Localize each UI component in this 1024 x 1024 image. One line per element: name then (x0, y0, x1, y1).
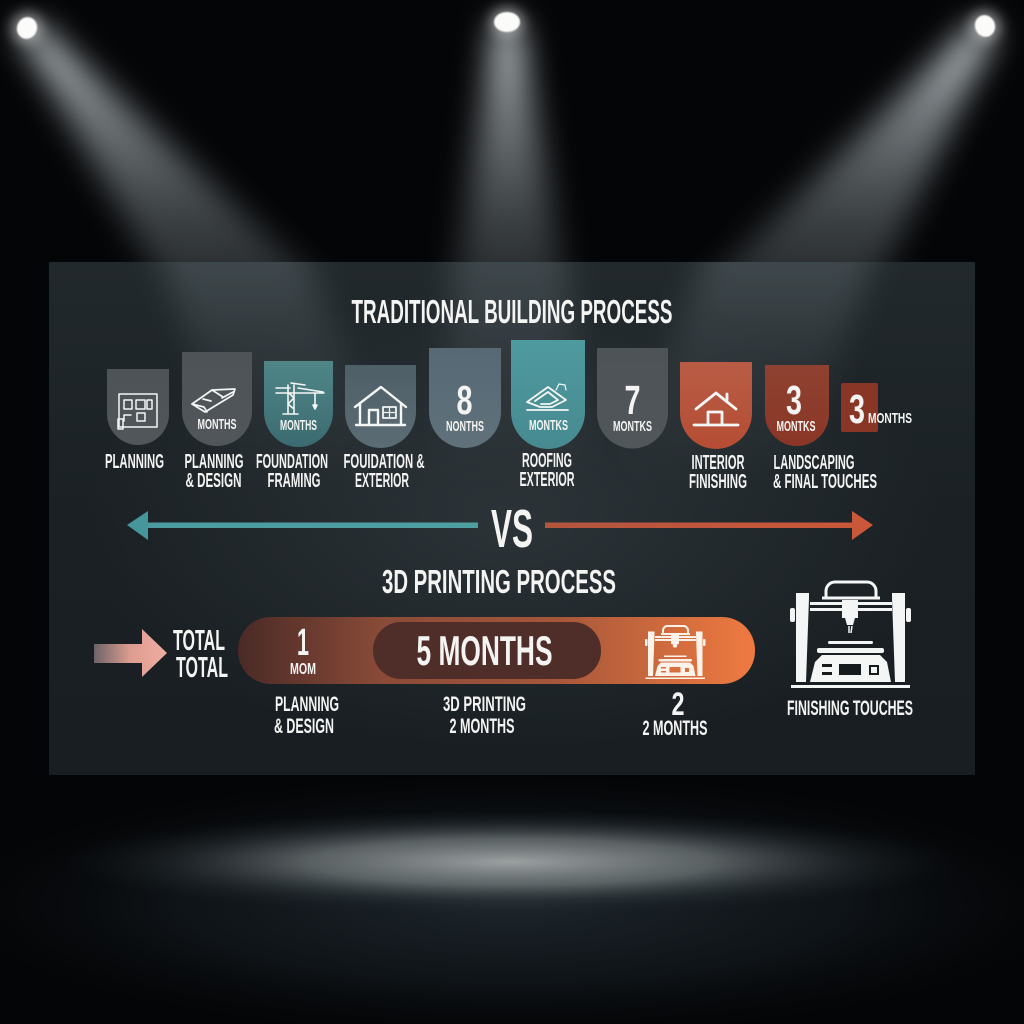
label: 3d printing 2 months (443, 693, 526, 738)
step 4: foundation and exterior (344, 365, 424, 492)
label: 3d printing 2 months: 2 MONTHS (450, 715, 514, 738)
label: finishing touches: FINISHING TOUCHES (787, 697, 913, 720)
step 6: roofing exterior (511, 340, 585, 491)
segment: 1 month planning: 1 (297, 622, 309, 664)
step 3: foundation framing: FRAMING (268, 470, 320, 492)
segment: 1 month planning (290, 622, 316, 678)
step 8: interior finishing: INTERIOR (692, 452, 745, 474)
step 2: planning and design: MONTHS (198, 416, 236, 433)
step 9: landscaping and final touches: LANDSCAPING (774, 452, 854, 474)
step 9: landscaping and final touches (765, 365, 877, 493)
step 8: interior finishing: FINISHING (689, 471, 747, 493)
heading: traditional process: TRADITIONAL BUILDING PROCESS (352, 293, 672, 330)
label: 2 months (642, 686, 708, 740)
heading: 3d printing process: 3D PRINTING PROCESS (382, 563, 616, 600)
label: 3d printing 2 months: 3D PRINTING (443, 693, 526, 716)
step 3: foundation framing: FOUNDATION (256, 451, 328, 473)
step 5: 8 months: 8 (456, 377, 472, 423)
label: 2 months: 2 MONTHS (642, 717, 708, 740)
label: planning and design: PLANNING (275, 693, 339, 716)
step 2: planning and design: & DESIGN (186, 470, 242, 492)
step 6: roofing exterior: MONTKS (529, 417, 568, 434)
step 1: planning: PLANNING (105, 451, 164, 473)
stage floor light pool (0, 775, 1024, 1024)
step 7: 7 months (597, 348, 668, 448)
label: planning and design (274, 693, 339, 738)
total label: TOTAL (173, 625, 225, 657)
total label: TOTAL (176, 652, 228, 684)
step 7: 7 months: MONTKS (613, 418, 652, 435)
step 3: foundation framing (256, 361, 333, 492)
step 10: 3 months badge: MONTHS (868, 410, 912, 427)
step 10: 3 months badge (841, 383, 912, 432)
spotlight lamps (11, 7, 1001, 44)
total label (173, 625, 228, 684)
step 4: foundation and exterior: FOUIDATION & (344, 451, 424, 473)
timeline bar (238, 617, 755, 684)
step 9: landscaping and final touches: MONTKS (776, 418, 816, 435)
step 7: 7 months: 7 (624, 377, 640, 423)
icon: small 3d printer (645, 626, 706, 679)
step 2: planning and design: PLANNING (184, 451, 244, 473)
segment: 5 months total: 5 MONTHS (416, 627, 552, 674)
step 5: 8 months: NONTHS (446, 418, 484, 435)
main panel (49, 230, 975, 775)
step 10: 3 months badge: 3 (849, 386, 865, 432)
spotlight beams (18, 22, 996, 300)
segment: 1 month planning: MOM (290, 661, 316, 678)
step 5: 8 months (429, 348, 501, 448)
step 3: foundation framing: MONTHS (280, 417, 317, 434)
step 2: planning and design (182, 352, 252, 492)
step 8: interior finishing (680, 362, 752, 493)
arrow: 3d printing, red, pointing right (545, 511, 873, 540)
step 4: foundation and exterior: EXTERIOR (355, 470, 409, 492)
step 6: roofing exterior: EXTERIOR (520, 469, 575, 491)
arrow: traditional, teal, pointing left (127, 511, 478, 540)
label: 2 months: 2 (672, 686, 684, 722)
step 9: landscaping and final touches: 3 (786, 377, 802, 423)
step 6: roofing exterior: ROOFING (522, 450, 572, 472)
total arrow (94, 629, 167, 677)
icon: large 3d printer (790, 582, 911, 688)
vs label: VS (491, 499, 533, 559)
label: planning and design: & DESIGN (274, 715, 334, 738)
step 1: planning (105, 369, 169, 473)
step 9: landscaping and final touches: & FINAL TOUCHES (773, 471, 877, 493)
segment: 5 months total (373, 622, 601, 679)
